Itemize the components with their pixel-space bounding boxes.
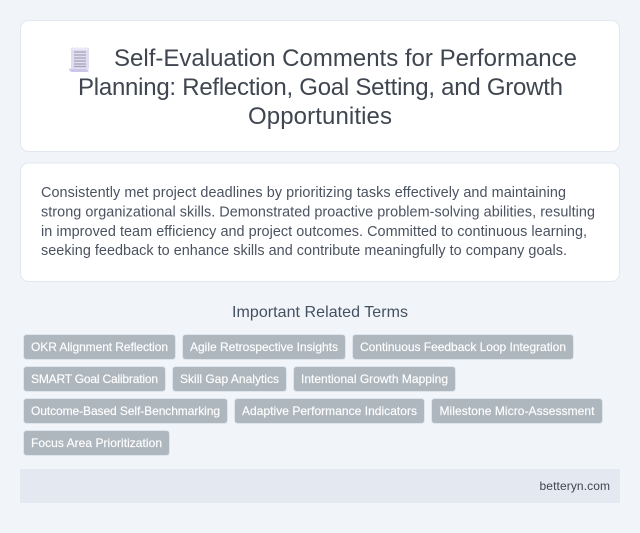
- tag: [24, 366, 166, 392]
- tag: Intentional Growth Mapping: [301, 372, 448, 386]
- tag: [24, 398, 228, 424]
- tag: [24, 430, 170, 456]
- tag: Adaptive Performance Indicators: [242, 404, 417, 418]
- tag: Continuous Feedback Loop Integration: [360, 340, 566, 354]
- text block: self-evaluation comment: seeking feedback to enhance skills and contribute meaningfully to company goals.: [41, 243, 567, 259]
- title: [78, 45, 577, 130]
- text block: self-evaluation comment: [41, 185, 595, 259]
- tag: SMART Goal Calibration: [31, 372, 158, 386]
- panel: title header: [20, 20, 620, 152]
- icon: document scroll: [69, 47, 89, 72]
- text block: self-evaluation comment: Consistently met project deadlines by prioritizing tasks effectively and maintaining: [41, 185, 566, 201]
- tag: [234, 398, 424, 424]
- tag: [432, 398, 602, 424]
- title: Self-Evaluation Comments for Performance: [114, 45, 577, 72]
- title: Opportunities: [248, 103, 392, 130]
- tag: [352, 334, 574, 360]
- tag: [294, 366, 456, 392]
- panel: description: [20, 163, 620, 282]
- text block: self-evaluation comment: strong organizational skills. Demonstrated proactive problem-solving abilities, resulting: [41, 204, 595, 220]
- footer: [20, 469, 620, 503]
- tag: [24, 334, 176, 360]
- text block: self-evaluation comment: in improved team efficiency and project outcomes. Committed to continuous learning,: [41, 224, 587, 240]
- tag: [172, 366, 286, 392]
- tag: OKR Alignment Reflection: [31, 340, 168, 354]
- tag: Focus Area Prioritization: [31, 436, 162, 450]
- footer: site name: betteryn.com: [540, 479, 610, 493]
- tag: Milestone Micro-Assessment: [440, 404, 595, 418]
- tag: Agile Retrospective Insights: [190, 340, 338, 354]
- tag: Outcome-Based Self-Benchmarking: [31, 404, 220, 418]
- heading: important related terms: Important Related Terms: [232, 304, 408, 321]
- tag list: [24, 334, 602, 456]
- tag: Skill Gap Analytics: [180, 372, 279, 386]
- title: Planning: Reflection, Goal Setting, and Growth: [78, 74, 563, 101]
- tag: [182, 334, 346, 360]
